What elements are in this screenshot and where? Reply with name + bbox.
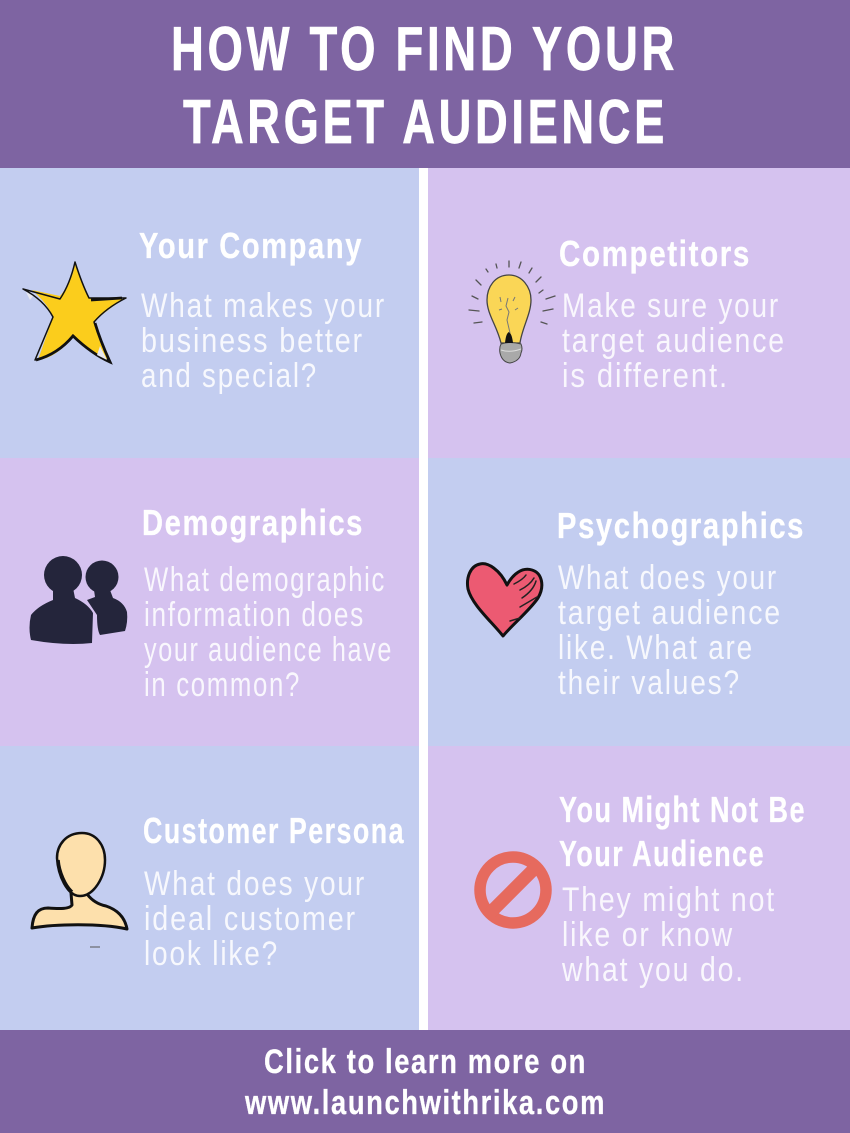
panel: demographics [0, 458, 419, 746]
text: your company [141, 287, 386, 395]
panel: your company [0, 168, 419, 458]
text: customer persona [144, 865, 366, 973]
text: competitors: is different. [562, 357, 729, 395]
panel: customer persona [0, 746, 419, 1030]
text: competitors [562, 287, 786, 395]
header banner [0, 0, 850, 168]
text: customer persona: ideal customer [144, 900, 357, 938]
heading: you might not be your audience [559, 789, 806, 874]
title: HOW TO FIND YOUR [171, 15, 678, 84]
text: demographics: What demographic [144, 561, 386, 599]
panel: competitors [428, 168, 850, 458]
footer banner [0, 1030, 850, 1133]
icon: star [23, 262, 126, 363]
icon: prohibition sign [480, 857, 546, 923]
heading: your company: Your Company [139, 225, 363, 266]
call to action [244, 1043, 606, 1122]
text: demographics: information does [144, 596, 365, 634]
text: you might not be your audience [561, 881, 776, 989]
heading: customer persona: Customer Persona [143, 810, 405, 851]
title: TARGET AUDIENCE [183, 88, 668, 157]
text: you might not be your audience: like or know [562, 916, 734, 954]
call to action: www.launchwithrika.com [244, 1084, 606, 1122]
heading: competitors: Competitors [559, 233, 751, 274]
text: you might not be your audience: They might not [562, 881, 776, 919]
text: customer persona: look like? [144, 935, 279, 973]
text: customer persona: What does your [144, 865, 366, 903]
text: you might not be your audience: what you do. [561, 951, 745, 989]
text: demographics [144, 561, 393, 704]
icon: heart [468, 564, 542, 636]
panel: psychographics [428, 458, 850, 746]
text: demographics: your audience have [144, 631, 393, 669]
text: your company: and special? [141, 357, 318, 395]
icon: people [30, 556, 127, 644]
text: psychographics: like. What are [558, 629, 754, 667]
text: your company: business better [141, 322, 364, 360]
text: psychographics: their values? [558, 664, 741, 702]
panel: you might not be your audience [428, 746, 850, 1030]
icon: person bust [32, 833, 127, 947]
heading: demographics: Demographics [142, 502, 364, 543]
text: psychographics: target audience [558, 594, 782, 632]
icon: light bulb [469, 261, 555, 363]
call to action: Click to learn more on [264, 1043, 587, 1081]
text: your company: What makes your [141, 287, 386, 325]
heading: you might not be your audience: Your Audience [559, 833, 765, 874]
text: competitors: Make sure your [562, 287, 780, 325]
text: competitors: target audience [562, 322, 786, 360]
title [171, 15, 678, 157]
text: demographics: in common? [144, 666, 301, 704]
text: psychographics [558, 559, 782, 702]
text: psychographics: What does your [558, 559, 778, 597]
